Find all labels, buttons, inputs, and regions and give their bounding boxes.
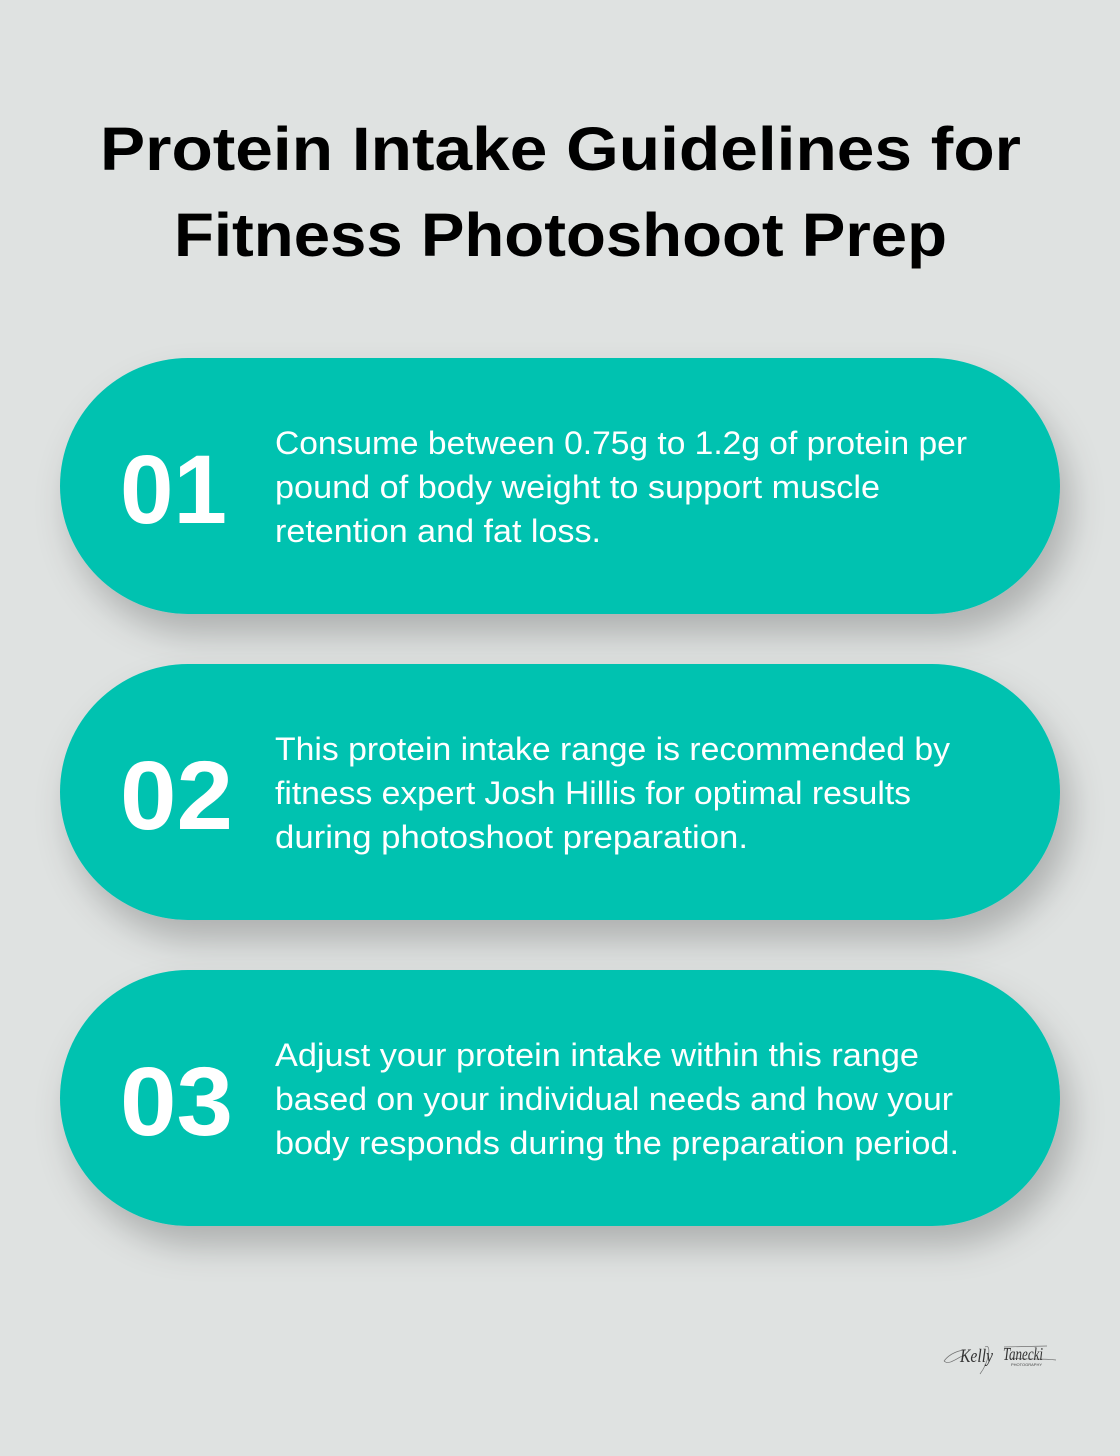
panel: step 03 bbox=[60, 970, 1060, 1226]
text block 03: Adjust your protein intake within this range bbox=[275, 1037, 919, 1073]
text block 01 bbox=[275, 425, 967, 549]
panel: step 01 bbox=[60, 358, 1060, 614]
logo: signature: Kelly bbox=[959, 1346, 993, 1367]
number 02: 02 bbox=[120, 741, 233, 850]
pill background 03 bbox=[60, 970, 1060, 1226]
pill background 02 bbox=[60, 664, 1060, 920]
text block 02 bbox=[275, 731, 950, 855]
title: Protein Intake Guidelines for bbox=[100, 115, 1021, 183]
panel: step 02 bbox=[60, 664, 1060, 920]
text block 01: Consume between 0.75g to 1.2g of protein per bbox=[275, 425, 967, 461]
logo: signature bbox=[944, 1344, 1056, 1374]
pill background 01 bbox=[60, 358, 1060, 614]
title: Fitness Photoshoot Prep bbox=[174, 201, 947, 269]
text block 03: body responds during the preparation period. bbox=[275, 1125, 959, 1161]
text block 02: This protein intake range is recommended by bbox=[275, 731, 950, 767]
text block 02: fitness expert Josh Hillis for optimal results bbox=[275, 775, 911, 811]
text block 03: based on your individual needs and how your bbox=[275, 1081, 953, 1117]
number 01: 01 bbox=[120, 435, 227, 544]
text block 01: pound of body weight to support muscle bbox=[275, 469, 880, 505]
number 03: 03 bbox=[120, 1047, 233, 1156]
title bbox=[100, 115, 1021, 269]
text block 03 bbox=[275, 1037, 959, 1161]
logo: signature: PHOTOGRAPHY bbox=[1011, 1363, 1043, 1367]
text block 01: retention and fat loss. bbox=[275, 513, 601, 549]
logo: signature: Tanecki bbox=[1003, 1344, 1043, 1364]
text block 02: during photoshoot preparation. bbox=[275, 819, 748, 855]
